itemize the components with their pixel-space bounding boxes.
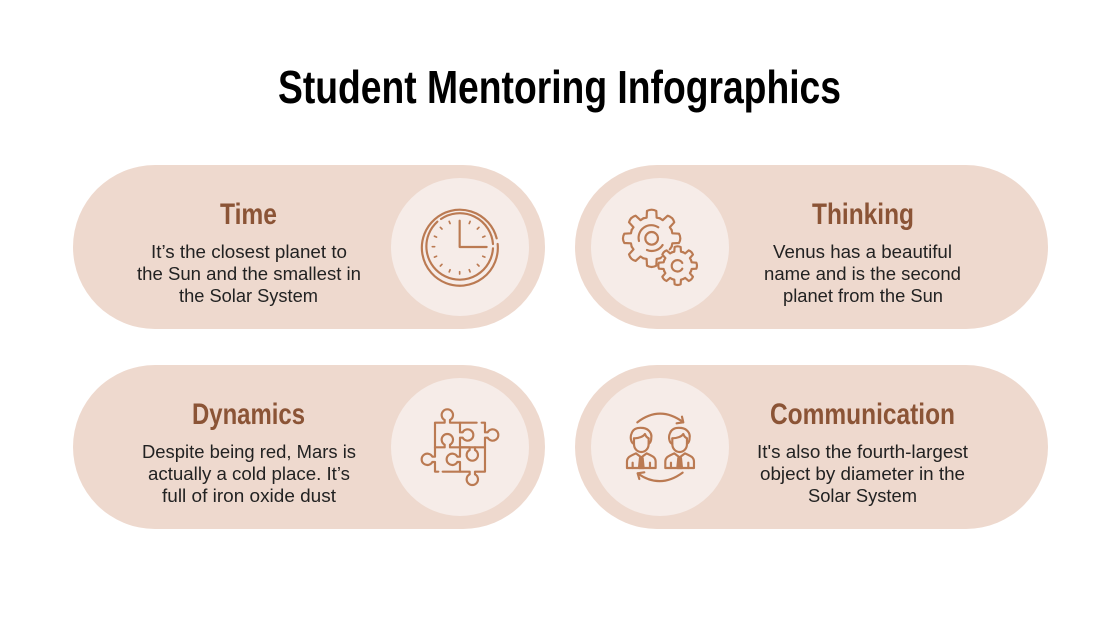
heading: dynamics: Dynamics bbox=[192, 398, 305, 431]
text block: thinking: name and is the second bbox=[764, 263, 961, 284]
panel: thinking bbox=[575, 165, 1048, 329]
text block: dynamics: actually a cold place. It’s bbox=[148, 463, 350, 484]
text block: dynamics: Despite being red, Mars is bbox=[142, 441, 356, 462]
panel: communication bbox=[575, 365, 1048, 529]
icon: clock bbox=[422, 210, 498, 286]
text block: communication: object by diameter in the bbox=[760, 463, 965, 484]
heading: communication: Communication bbox=[770, 398, 955, 431]
panel: dynamics bbox=[73, 365, 545, 529]
heading: thinking: Thinking bbox=[812, 198, 914, 231]
text block: thinking bbox=[764, 241, 961, 306]
icon: puzzle bbox=[422, 409, 498, 485]
text block: time: It’s the closest planet to bbox=[151, 241, 347, 262]
heading: time: Time bbox=[220, 198, 277, 231]
icon: mentoring people bbox=[627, 414, 694, 481]
text block: dynamics: full of iron oxide dust bbox=[162, 485, 336, 506]
text block: dynamics bbox=[142, 441, 356, 506]
text block: communication: It's also the fourth-largest bbox=[757, 441, 968, 462]
text block: communication bbox=[757, 441, 968, 506]
panel: time bbox=[73, 165, 545, 329]
title: Student Mentoring Infographics bbox=[278, 61, 841, 113]
text block: communication: Solar System bbox=[808, 485, 917, 506]
text block: time bbox=[137, 241, 361, 306]
text block: time: the Sun and the smallest in bbox=[137, 263, 361, 284]
text block: time: the Solar System bbox=[179, 285, 318, 306]
text block: thinking: Venus has a beautiful bbox=[773, 241, 952, 262]
text block: thinking: planet from the Sun bbox=[783, 285, 943, 306]
icon: gears bbox=[623, 210, 697, 285]
